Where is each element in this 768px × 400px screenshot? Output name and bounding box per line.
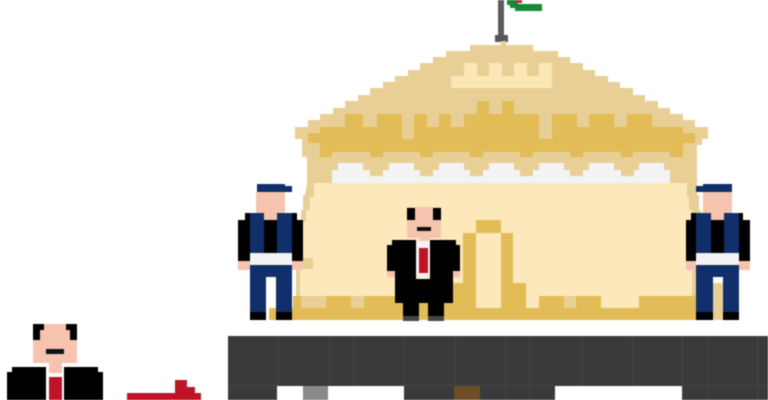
jacket	[238, 213, 303, 261]
trousers	[696, 265, 739, 312]
boots	[696, 312, 713, 320]
hat	[257, 184, 292, 192]
hands	[238, 261, 250, 270]
moustache	[46, 349, 64, 354]
arrow	[127, 380, 201, 400]
jacket	[686, 213, 750, 261]
shoes	[403, 316, 419, 321]
tan block by guard hand	[297, 258, 313, 269]
icon: flag	[495, 0, 542, 42]
left guard	[238, 184, 303, 320]
tent roof	[295, 41, 708, 183]
belt	[250, 253, 292, 265]
trousers	[250, 265, 292, 312]
jacket	[7, 367, 46, 400]
legs	[403, 303, 419, 317]
shirt	[416, 241, 430, 279]
bottom-left man in suit	[7, 324, 103, 400]
scalloped white trim	[332, 163, 670, 183]
vest	[696, 213, 739, 253]
tent wall	[300, 183, 692, 310]
head	[703, 192, 732, 213]
hands	[387, 271, 395, 277]
head	[33, 324, 77, 363]
hands	[686, 261, 696, 270]
door	[476, 233, 501, 308]
moustache	[417, 227, 431, 231]
roof crown	[451, 63, 552, 88]
tie	[419, 248, 428, 273]
window right	[555, 386, 682, 400]
grey door	[303, 386, 328, 400]
hair	[407, 208, 415, 220]
jacket	[387, 240, 460, 303]
tent floor and door frame	[269, 220, 722, 320]
head	[256, 192, 285, 213]
right guard	[686, 184, 750, 320]
hat	[696, 184, 732, 192]
head	[407, 207, 441, 238]
belt	[696, 253, 739, 265]
window left	[277, 386, 404, 400]
roof band	[308, 101, 695, 157]
wall edge	[297, 183, 701, 296]
tent	[269, 41, 722, 320]
platform	[228, 336, 768, 400]
floor patches	[301, 296, 576, 308]
boots	[250, 312, 266, 320]
hair	[33, 324, 44, 330]
tie	[49, 377, 62, 400]
centre man in suit	[387, 207, 460, 321]
trim teeth	[370, 163, 634, 176]
vest	[250, 213, 292, 253]
dark blocks	[228, 336, 768, 400]
block seams	[228, 336, 768, 400]
brown door	[454, 386, 480, 400]
